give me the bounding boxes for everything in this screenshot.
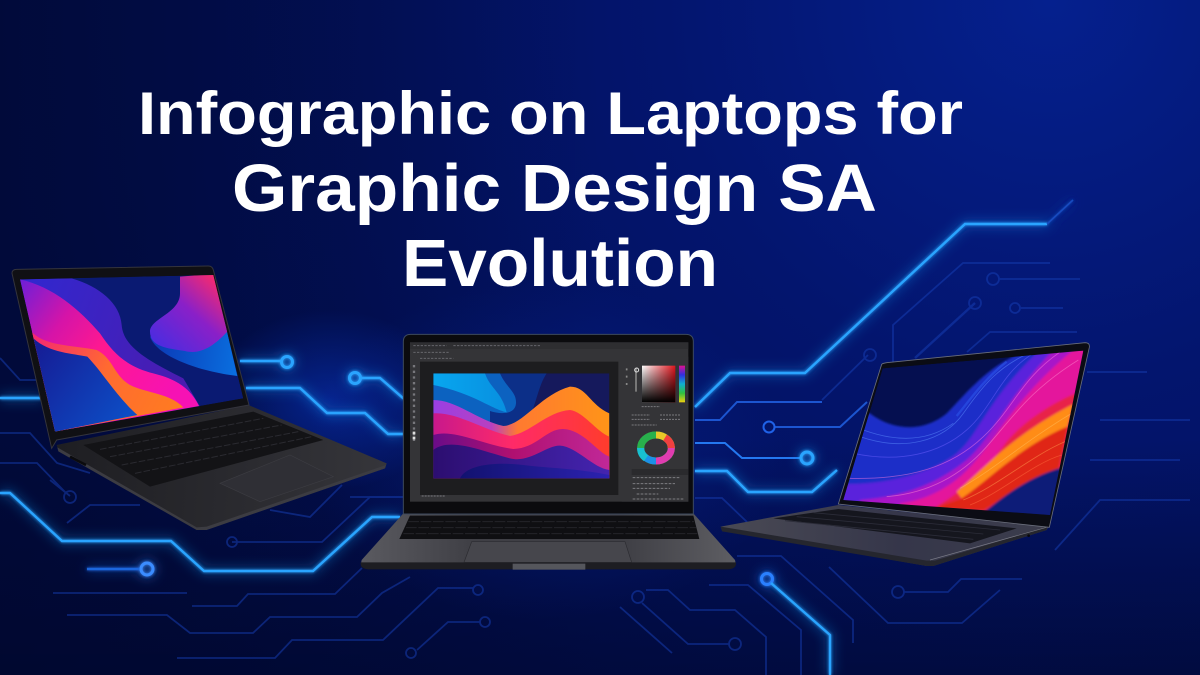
canvas [420, 362, 618, 495]
medium circuit traces [695, 402, 867, 458]
right laptop base [721, 505, 1048, 566]
right laptop keyboard [773, 509, 1017, 543]
left laptop base [57, 405, 387, 530]
left laptop keyboard [83, 412, 323, 487]
center laptop keyboard [399, 516, 699, 539]
left laptop lid [12, 266, 249, 448]
center laptop trackpad [464, 542, 632, 562]
faint circuit traces [0, 263, 1190, 675]
color wheel [641, 435, 671, 461]
side panels [622, 357, 688, 502]
center laptop base [361, 513, 736, 570]
title: Graphic Design SA [232, 151, 877, 226]
laptop: right, flowing wave wallpaper [721, 340, 1100, 566]
center laptop lid [403, 334, 693, 514]
laptop: center, photo editor [361, 334, 736, 570]
bright glowing circuit traces [0, 200, 1073, 675]
right laptop screen art [843, 350, 1084, 515]
title: Evolution [402, 226, 718, 301]
title: Infographic on Laptops for [138, 80, 963, 147]
tool strip [410, 365, 417, 442]
artwork [433, 373, 609, 478]
title [138, 80, 963, 301]
right laptop lid [838, 343, 1089, 527]
laptop: left, abstract wallpaper [12, 266, 387, 530]
color picker [642, 366, 685, 402]
editor window [410, 342, 688, 502]
left laptop screen art [20, 274, 243, 432]
